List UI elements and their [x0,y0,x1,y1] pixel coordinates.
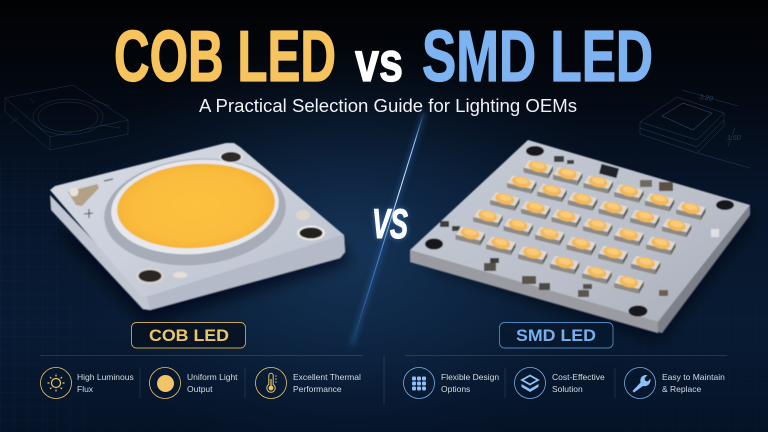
title: SMD LED [422,17,653,97]
feature: Cost-Effective Solution: Cost-Effective [552,372,605,382]
feature: Flexible Design Options [404,368,499,398]
feature: Easy to Maintain & Replace: Easy to Maintain [662,372,725,382]
feature: Uniform Light Output [150,368,238,398]
feature: High Luminous Flux: High Luminous [77,372,134,382]
COB LED badge: COB LED [149,326,229,345]
feature: Easy to Maintain & Replace [624,368,725,398]
icon: thermometer [256,368,286,398]
blueprint sketch: COB [5,85,128,150]
small components [440,156,719,297]
diagonal light slash [352,112,424,345]
board holes [425,146,734,316]
title: COB LED [114,17,336,97]
feature: Uniform Light Output: Uniform Light [187,372,238,382]
feature: Uniform Light Output: Output [187,384,213,394]
LED array [456,159,706,294]
subtitle: A Practical Selection Guide for Lighting OEMs [199,96,577,116]
feature: Cost-Effective Solution: Solution [552,384,583,394]
feature: Easy to Maintain & Replace: & Replace [662,384,701,394]
SMD LED board [410,140,756,340]
contact pad and polarity marks [68,179,310,278]
title [114,17,653,97]
COB LED badge [132,322,246,348]
VS emblem: VS [372,200,408,247]
COB LED chip [50,143,350,322]
blueprint sketch: SMD: 3.20 [699,94,713,103]
feature: Flexible Design Options: Options [441,384,470,394]
blueprint sketch: SMD [640,90,750,168]
icon: sun [40,368,72,398]
feature: Excellent Thermal Performance: Performance [293,384,342,394]
feature: High Luminous Flux [40,368,134,398]
feature: Cost-Effective Solution [514,368,605,398]
VS emblem [372,200,408,247]
mounting holes [136,151,325,284]
feature: Excellent Thermal Performance [256,368,361,398]
SMD LED badge: SMD LED [516,326,596,345]
icon: grid of dots [404,368,434,398]
icon: light disc [150,368,180,398]
blueprint sketch: SMD: 1.60 [727,135,741,142]
feature: High Luminous Flux: Flux [77,384,94,394]
SMD LED badge [500,322,613,348]
icon: stacked layers [514,368,546,398]
feature: Flexible Design Options: Flexible Design [441,372,499,382]
icon: wrench [624,368,656,398]
VS emblem: VS [372,200,408,247]
feature: Excellent Thermal Performance: Excellent Thermal [293,372,361,382]
title: vs [355,30,403,93]
